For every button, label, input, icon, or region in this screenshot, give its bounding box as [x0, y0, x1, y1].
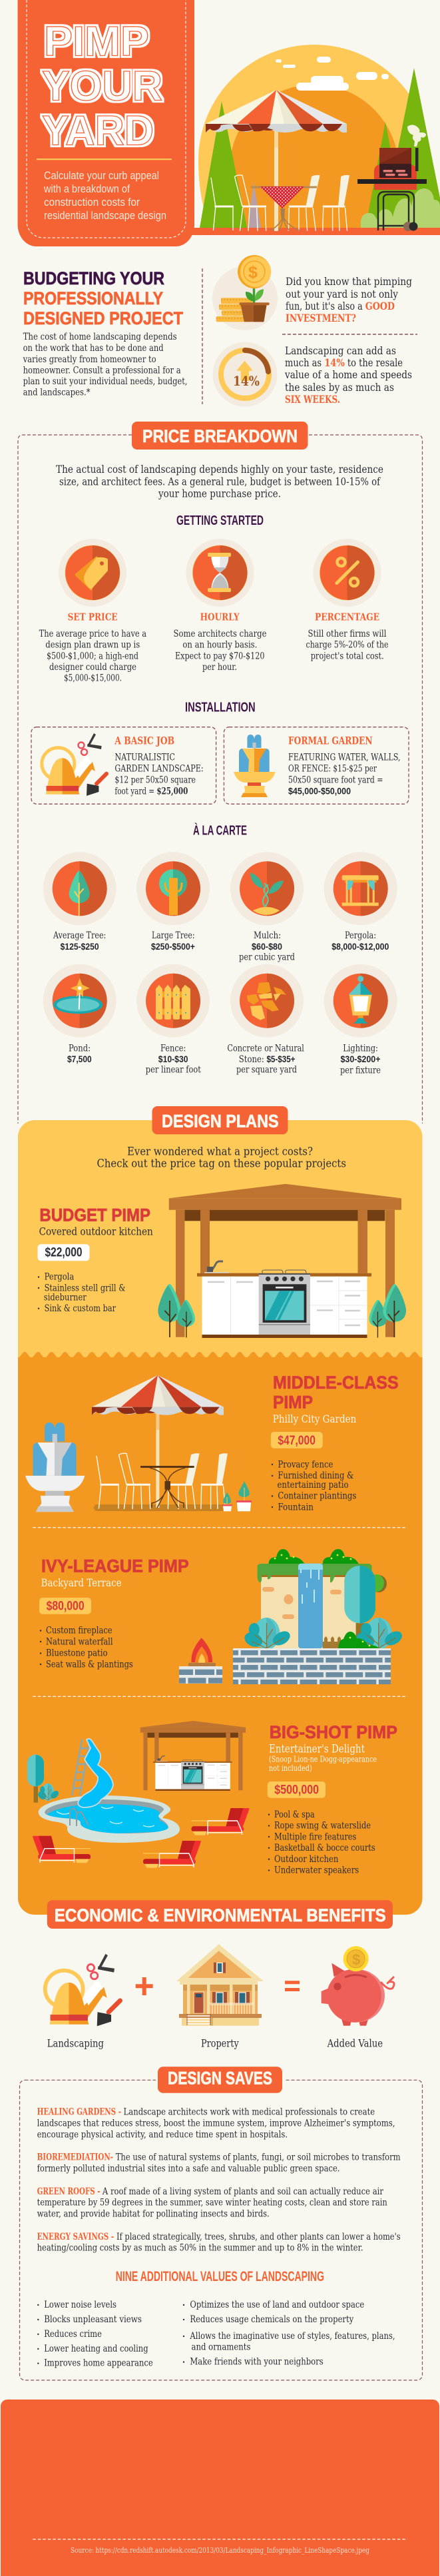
list: left: Lower noise levels [44, 2300, 116, 2310]
illustration: loungers [33, 1808, 249, 1867]
text: bioremediation [37, 2152, 401, 2174]
item: large tree: Large Tree: [152, 930, 194, 941]
card: formal garden [224, 727, 409, 804]
list: Provacy fence [278, 1459, 333, 1470]
list: Outdoor kitchen [274, 1854, 338, 1865]
item: lighting: Lighting: [343, 1043, 378, 1054]
heading: nine additional values: NINE ADDITIONAL VALUES OF LANDSCAPING [116, 2269, 324, 2284]
item: percentage: charge 5%-20% of the [306, 640, 389, 651]
text: green roofs: A roof made of a living system of plants and soil can actually reduce air [102, 2186, 383, 2197]
card: a basic job: NATURALISTIC [114, 753, 175, 763]
card: formal garden: OR FENCE: $15-$25 per [288, 764, 377, 775]
plan: ivy-league pimp: IVY-LEAGUE PIMP [41, 1556, 189, 1576]
item: set price [39, 539, 146, 684]
list: right: Allows the imaginative use of styles, features, plans, [190, 2331, 395, 2342]
text: healing gardens: HEALING GARDENS - [37, 2107, 121, 2118]
text: bioremediation: BIOREMEDIATION- [37, 2152, 113, 2163]
list: Underwater speakers [274, 1865, 359, 1876]
icon: watering can [45, 1954, 120, 2026]
card: formal garden: FEATURING WATER, WALLS, [288, 753, 401, 763]
illustration: patio [25, 1375, 252, 1512]
icon: money plant [212, 255, 278, 330]
title: pimp your yard: PIMP [44, 19, 149, 65]
list: Sink & custom bar [45, 1303, 116, 1314]
subtitle: Calculate your curb appeal [44, 169, 159, 182]
item: percentage: Still other firms will [308, 629, 387, 639]
list: right [183, 2300, 395, 2368]
subtitle [43, 169, 166, 222]
text: bioremediation: formerly polluted industrial sites into a safe and valuable public green space. [37, 2163, 339, 2174]
item: set price: design plan drawn up is [45, 640, 140, 651]
illustration: pool [27, 1739, 180, 1843]
text: green roofs [37, 2186, 387, 2219]
icon: fountain [234, 735, 276, 797]
list: right: Reduces usage chemicals on the property [190, 2314, 353, 2325]
item: percentage [306, 539, 389, 661]
text: resale value: value of a home and speeds [284, 369, 412, 381]
card: a basic job: $12 per 50x50 square [114, 775, 196, 786]
item: fence [136, 964, 210, 1076]
price tag: $80,000 [47, 1600, 85, 1614]
list: left [37, 2300, 153, 2369]
heading: design plans [152, 1106, 288, 1134]
list [272, 1459, 356, 1512]
item: stone [227, 964, 304, 1076]
plan: budget pimp: BUDGET PIMP [39, 1205, 150, 1225]
heading: price breakdown: PRICE BREAKDOWN [142, 426, 298, 446]
text: budgeting body: and landscapes.* [23, 388, 91, 398]
panel: price breakdown [18, 422, 422, 1124]
item: average tree [43, 852, 116, 952]
plan: ivy-league pimp [39, 1549, 405, 1684]
list: Basketball & bocce courts [274, 1843, 375, 1853]
heading: design plans: DESIGN PLANS [162, 1111, 279, 1131]
price tag: $22,000 [45, 1246, 83, 1260]
icon: fountain [25, 1423, 85, 1512]
text: budgeting body: homeowner. Consult a professional for a [23, 365, 181, 376]
text: intro: Check out the price tag on these popular projects [97, 1157, 346, 1169]
list: Pergola [45, 1272, 74, 1283]
text: budgeting body: plan to suit your individual needs, budget, [23, 376, 188, 387]
panel: design plans [18, 1106, 422, 1915]
title: pimp your yard: YARD [42, 108, 154, 155]
list: left: Reduces crime [44, 2329, 102, 2340]
text: budgeting body [23, 332, 188, 398]
panel: design saves [20, 2065, 422, 2380]
equation: landscaping [45, 1954, 120, 2049]
item: set price: designer could charge [49, 662, 136, 673]
text: good investment: fun, but it's also a GOOD [286, 300, 395, 312]
text: resale value: Landscaping can add as [285, 345, 396, 357]
equation: landscaping: Landscaping [47, 2037, 104, 2049]
item: set price: $500-$1,000; a high-end [47, 651, 138, 661]
plan: big-shot pimp: not included) [269, 1763, 312, 1773]
item: pergola: Pergola: [345, 930, 376, 941]
icon: percent [313, 539, 381, 607]
list [40, 1626, 133, 1670]
text: good investment: INVESTMENT? [286, 312, 356, 324]
clouds [276, 57, 389, 91]
icon: 14% ring [213, 342, 277, 406]
icon: house [176, 1944, 264, 2026]
heading: budgeting: PROFESSIONALLY [23, 288, 163, 308]
item: hourly: Some architects charge [173, 629, 266, 639]
plan: big-shot pimp: BIG-SHOT PIMP [270, 1722, 397, 1742]
item: lighting: per fixture [340, 1066, 381, 1076]
card: formal garden: FORMAL GARDEN [288, 735, 373, 747]
header illustration: patio scene [186, 45, 440, 235]
list: Bluestone patio [46, 1648, 108, 1659]
heading: budgeting: DESIGNED PROJECT [23, 308, 183, 328]
illustration: outdoor kitchen [158, 1184, 406, 1338]
item: percentage: PERCENTAGE [315, 612, 379, 623]
item: large tree [136, 852, 210, 952]
trees [200, 68, 440, 228]
text: healing gardens: Landscape architects work with medical professionals to create [124, 2107, 375, 2118]
text: intro [56, 464, 383, 500]
text: resale value [284, 345, 412, 406]
heading: budgeting [23, 268, 183, 328]
text: energy savings: heating/cooling costs by as much as 50% in the summer and up to 8% in the winter. [37, 2243, 363, 2254]
icon: fence [136, 964, 210, 1038]
list: Multiple fire features [274, 1831, 356, 1842]
list: left: Blocks unpleasant views [44, 2314, 142, 2325]
heading: budgeting: BUDGETING YOUR [23, 268, 164, 288]
list [38, 1272, 125, 1314]
text: intro: size, and architect fees. As a general rule, budget is between 10-15% of [59, 476, 381, 487]
plan: middle-class pimp: PIMP [273, 1392, 313, 1412]
icon: watering can [42, 733, 107, 796]
text: energy savings [37, 2232, 401, 2254]
icon: equals [285, 1981, 300, 1991]
list: Natural waterfall [46, 1636, 113, 1647]
text: good investment [286, 276, 412, 324]
list: Furnished dining & [278, 1470, 353, 1481]
illustration: kitchen [140, 1721, 246, 1791]
item: stone: Stone: $5-$35+ [239, 1054, 295, 1065]
item: fence: per linear foot [146, 1065, 201, 1076]
item: lighting [324, 964, 397, 1076]
icon: pond [43, 964, 116, 1038]
card: a basic job: foot yard = $25,000 [114, 786, 188, 797]
item: set price: The average price to have a [39, 629, 146, 639]
text: budgeting body: varies greatly from homeowner to [23, 354, 156, 365]
list: right: and ornaments [192, 2342, 250, 2353]
heading: economic and environmental benefits: ECONOMIC & ENVIRONMENTAL BENEFITS [55, 1905, 386, 1925]
list: right: Optimizes the use of land and outdoor space [190, 2300, 364, 2310]
item: set price: $5,000-$15,000. [64, 673, 122, 684]
card: a basic job [31, 727, 216, 804]
item: mulch [230, 852, 304, 963]
heading: economic and environmental benefits [47, 1900, 393, 1929]
list: left: Lower heating and cooling [44, 2344, 148, 2354]
list: Pool & spa [274, 1809, 315, 1820]
item: pond [43, 964, 116, 1064]
icon: tree [43, 852, 116, 925]
heading: price breakdown [132, 422, 308, 450]
item: pond: Pond: [69, 1043, 91, 1054]
list: Custom fireplace [46, 1626, 112, 1636]
chairs [211, 175, 349, 231]
text: resale value: SIX WEEKS. [285, 393, 340, 406]
icon: pergola [324, 852, 397, 925]
item: hourly: on an hourly basis. [182, 640, 257, 651]
ground strip [186, 228, 440, 235]
text: intro: your home purchase price. [158, 488, 281, 500]
icon: hourglass [186, 539, 254, 607]
text: healing gardens [37, 2107, 395, 2140]
title: pimp your yard: YOUR [42, 63, 162, 109]
table [251, 186, 317, 231]
item: percentage: project's total cost. [311, 651, 384, 661]
item: lighting: $30-$200+ [341, 1054, 381, 1064]
illustration: fire pit [179, 1638, 222, 1684]
icon: 14% ring: 14% [233, 373, 260, 389]
item: average tree: Average Tree: [53, 930, 106, 941]
plan: ivy-league pimp: Backyard Terrace [41, 1576, 122, 1589]
text: green roofs: water, and provide habitat for pollinating insects and birds. [37, 2208, 270, 2219]
price tag: $500,000 [274, 1783, 319, 1797]
list: Stainless stell grill & [45, 1283, 125, 1293]
item: pergola [324, 852, 397, 952]
list [268, 1809, 375, 1876]
text: good investment: Did you know that pimping [286, 276, 412, 288]
panel: title banner [17, 0, 194, 246]
grill [357, 125, 427, 231]
list: Fountain [278, 1502, 314, 1512]
icon: money plant: $ [248, 263, 258, 282]
item: hourly: per hour. [202, 662, 237, 673]
plan: big-shot pimp [27, 1721, 397, 1876]
equation: property: Property [201, 2037, 239, 2049]
icon: sprout [230, 852, 304, 925]
equation: property [176, 1944, 264, 2049]
item: average tree: $125-$250 [61, 941, 99, 952]
bush [361, 188, 440, 228]
text: good investment: out your yard is not only [286, 288, 398, 300]
umbrella [206, 90, 347, 231]
text: energy savings: ENERGY SAVINGS - [37, 2232, 114, 2242]
item: hourly: HOURLY [200, 612, 240, 623]
plan: budget pimp: Covered outdoor kitchen [39, 1225, 153, 1237]
plan: big-shot pimp: Entertainer's Delight [269, 1743, 365, 1756]
icon: large tree [136, 852, 210, 925]
list: sideburner [44, 1292, 87, 1303]
price tag: $47,000 [278, 1434, 316, 1448]
item: mulch: $60-$80 [252, 941, 282, 952]
item: hourly [173, 539, 266, 673]
text: healing gardens: encourage physical activity, and reduce time spent in hospitals. [37, 2129, 288, 2140]
text: intro: Ever wondered what a project costs? [127, 1145, 313, 1157]
item: fence: $10-$30 [158, 1054, 188, 1064]
item: stone: per square yard [236, 1065, 297, 1076]
icon: lantern [324, 964, 397, 1038]
item: stone: Concrete or Natural [227, 1043, 304, 1054]
item: mulch: per cubic yard [239, 952, 295, 963]
lilac shape [248, 182, 261, 228]
text: resale value: the sales by as much as [285, 382, 394, 394]
plan: middle-class pimp: Philly City Garden [273, 1413, 356, 1425]
text: resale value: much as 14% to the resale [285, 356, 403, 369]
subtitle: construction costs for [44, 196, 140, 208]
text: budgeting body: on the work that has to be done and [23, 343, 164, 354]
list: Rope swing & waterslide [274, 1821, 371, 1831]
icon: piggy bank [322, 1946, 394, 2026]
illustration: waterfall terrace [233, 1549, 405, 1684]
item: mulch: Mulch: [254, 930, 281, 941]
list: right: Make friends with your neighbors [190, 2357, 324, 2368]
item: fence: Fence: [160, 1043, 186, 1054]
equation: added value: Added Value [327, 2037, 383, 2049]
heading: a la carte: À LA CARTE [193, 822, 247, 838]
title: pimp your yard [42, 19, 162, 155]
icon: plus [136, 1977, 153, 1995]
item: pergola: $8,000-$12,000 [331, 941, 389, 952]
list: Seat walls & plantings [46, 1659, 133, 1670]
card: formal garden: $45,000-$50,000 [288, 785, 351, 796]
item: set price: SET PRICE [68, 612, 118, 623]
plan: big-shot pimp: (Snoop Lion-ne Dogg-appearance [269, 1754, 377, 1764]
footer panel [1, 2400, 439, 2576]
list: Container plantings [278, 1491, 356, 1502]
icon: stones [230, 964, 304, 1038]
plan: middle-class pimp: MIDDLE-CLASS [273, 1373, 399, 1393]
plan: budget pimp [37, 1184, 406, 1338]
text: budgeting body: The cost of home landscaping depends [23, 332, 177, 342]
card: a basic job: A BASIC JOB [114, 735, 174, 747]
heading: design saves [156, 2065, 284, 2095]
text: green roofs: GREEN ROOFS - [37, 2186, 101, 2197]
list: left: Improves home appearance [44, 2358, 153, 2369]
heading: design saves: DESIGN SAVES [168, 2069, 272, 2089]
card: formal garden: 50x50 square foot yard = [288, 775, 383, 786]
item: large tree: $250-$500+ [151, 941, 195, 952]
item: hourly: Expect to pay $70-$120 [175, 651, 265, 661]
icon: price tag [59, 539, 126, 607]
subtitle: with a breakdown of [43, 182, 130, 195]
sun backdrop [198, 45, 430, 228]
icon: piggy bank: $ [352, 1951, 360, 1968]
subtitle: residential landscape design [44, 209, 166, 222]
heading: getting started: GETTING STARTED [176, 513, 264, 528]
text: intro [97, 1145, 346, 1169]
plan: middle-class pimp [25, 1373, 399, 1512]
card: a basic job: GARDEN LANDSCAPE: [114, 764, 204, 775]
item: pond: $7,500 [67, 1054, 92, 1064]
text: intro: The actual cost of landscaping depends highly on your taste, residence [56, 464, 383, 476]
icon: potted plants [222, 1481, 252, 1511]
heading: installation: INSTALLATION [185, 700, 256, 715]
equation: added value [322, 1946, 394, 2049]
list: entertaining patio [277, 1480, 349, 1490]
